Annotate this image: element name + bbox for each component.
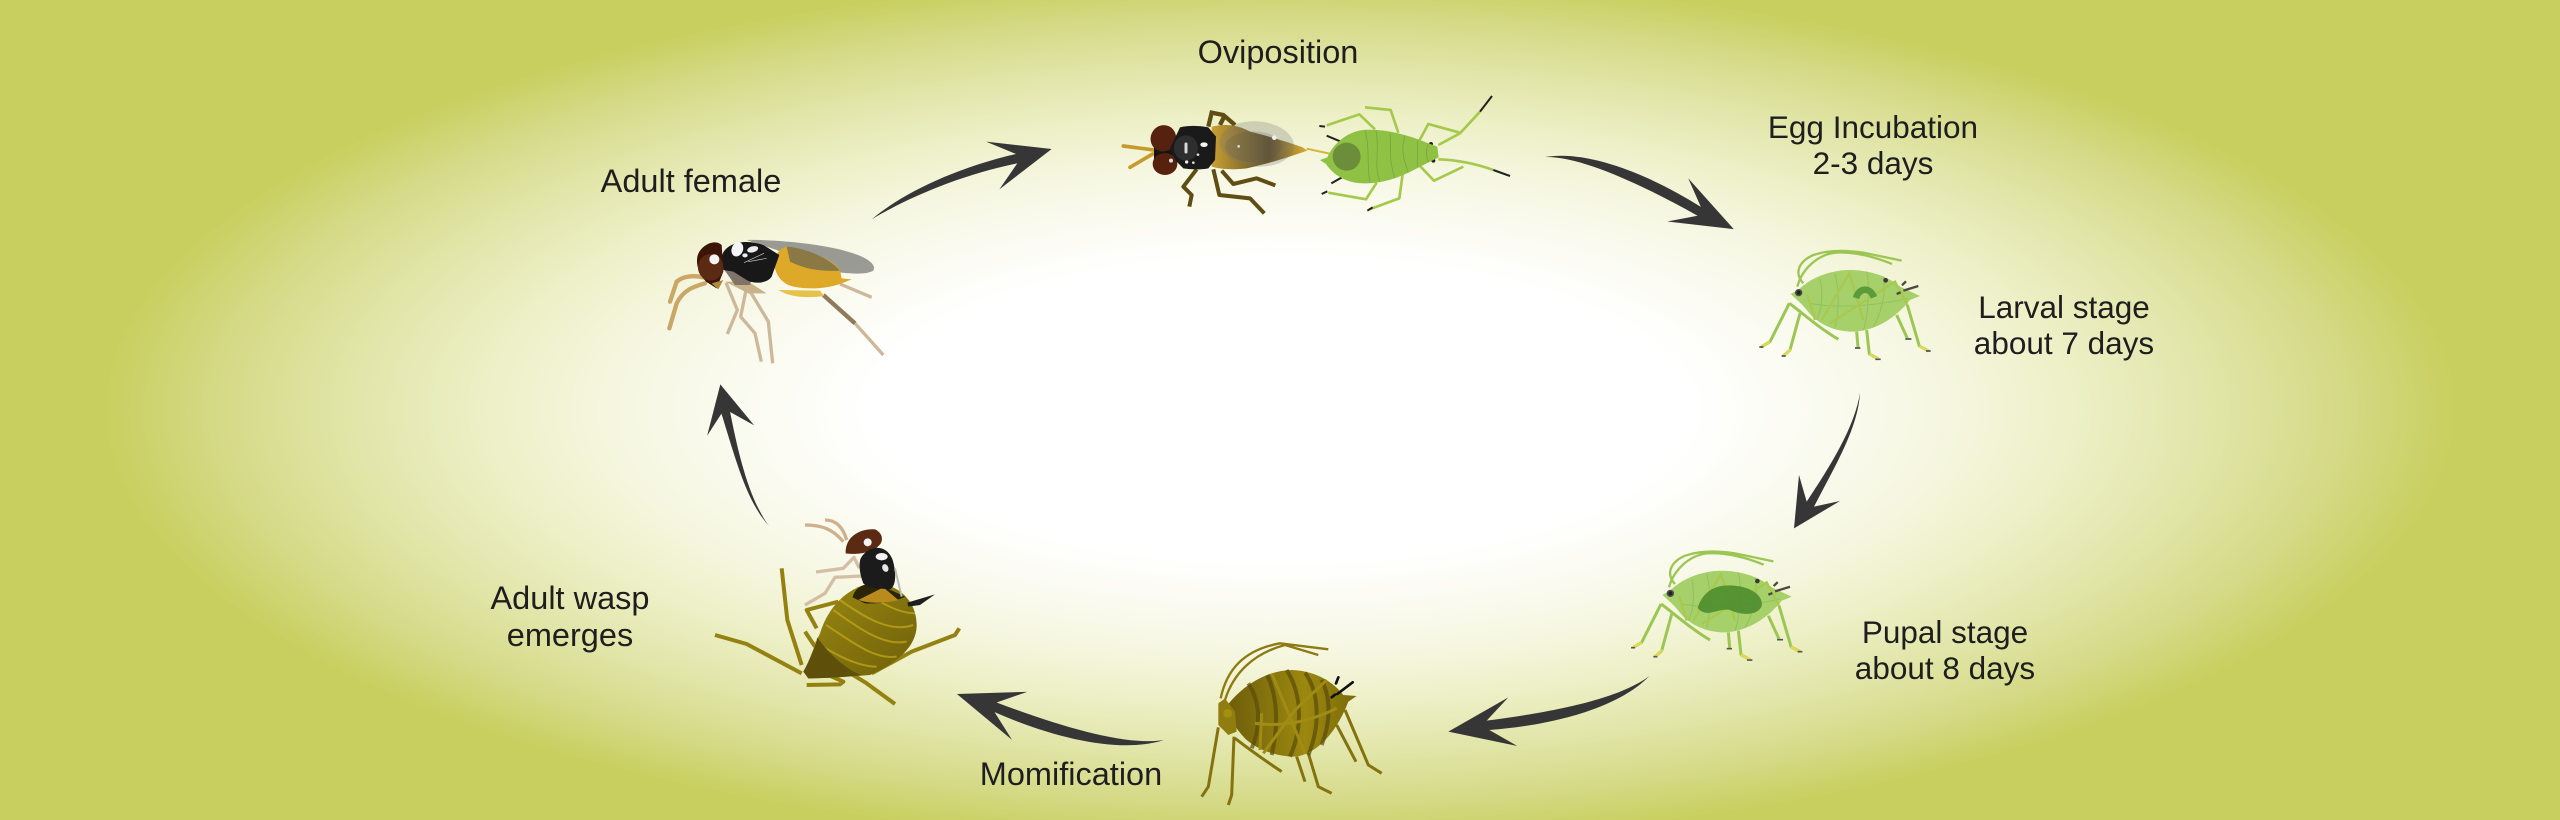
label: Adult wasp emerges: emerges — [507, 617, 633, 653]
mummy legs and antenna — [715, 568, 959, 704]
icon: wasp ovipositing — [1123, 113, 1341, 213]
label: Egg Incubation 2-3 days: Egg Incubation — [1768, 109, 1978, 145]
icon: green aphid with pupa inside — [1631, 552, 1802, 660]
arrow: larval to pupal stage — [1794, 393, 1860, 528]
arrow: adult female to oviposition — [872, 142, 1052, 219]
icon: adult female wasp side view — [669, 240, 883, 363]
label: Pupal stage about 8 days: about 8 days — [1855, 650, 2035, 686]
ovipositor tip sticking out — [907, 594, 935, 607]
label: Egg Incubation 2-3 days: 2-3 days — [1813, 145, 1933, 181]
wasp head — [846, 529, 882, 554]
title: Oviposition: Oviposition — [1198, 34, 1358, 70]
arrow: momification to adult wasp emerging — [950, 644, 1164, 803]
icon: green aphid host seen from above — [1319, 96, 1510, 211]
wasp pupa inside aphid — [1698, 585, 1762, 614]
label: Larval stage about 7 days — [1974, 289, 2154, 361]
arrow: adult wasp emerging to adult female — [674, 384, 815, 526]
wasp thorax — [860, 548, 895, 589]
mummy body — [803, 583, 917, 678]
arrow: pupal stage to momification — [1448, 676, 1649, 746]
icon: mummified aphid — [1202, 643, 1382, 805]
icon: adult wasp emerging from mummified aphid — [715, 520, 959, 704]
label: Adult wasp emerges: Adult wasp — [491, 580, 649, 616]
icon: green aphid with larva inside — [1759, 251, 1931, 359]
arrow: oviposition to egg incubation — [1545, 102, 1742, 273]
label: Momification: Momification — [980, 756, 1162, 792]
label: Larval stage about 7 days: about 7 days — [1974, 325, 2154, 361]
label: Egg Incubation 2-3 days — [1768, 109, 1978, 181]
label: Adult female: Adult female — [601, 163, 781, 199]
label: Larval stage about 7 days: Larval stage — [1978, 289, 2150, 325]
wasp larva inside aphid — [1856, 290, 1874, 298]
emergence hole — [853, 584, 905, 603]
wasp legs and antennae — [805, 520, 847, 542]
label: Pupal stage about 8 days — [1855, 614, 2035, 686]
label: Adult wasp emerges — [491, 580, 649, 653]
label: Pupal stage about 8 days: Pupal stage — [1862, 614, 2028, 650]
